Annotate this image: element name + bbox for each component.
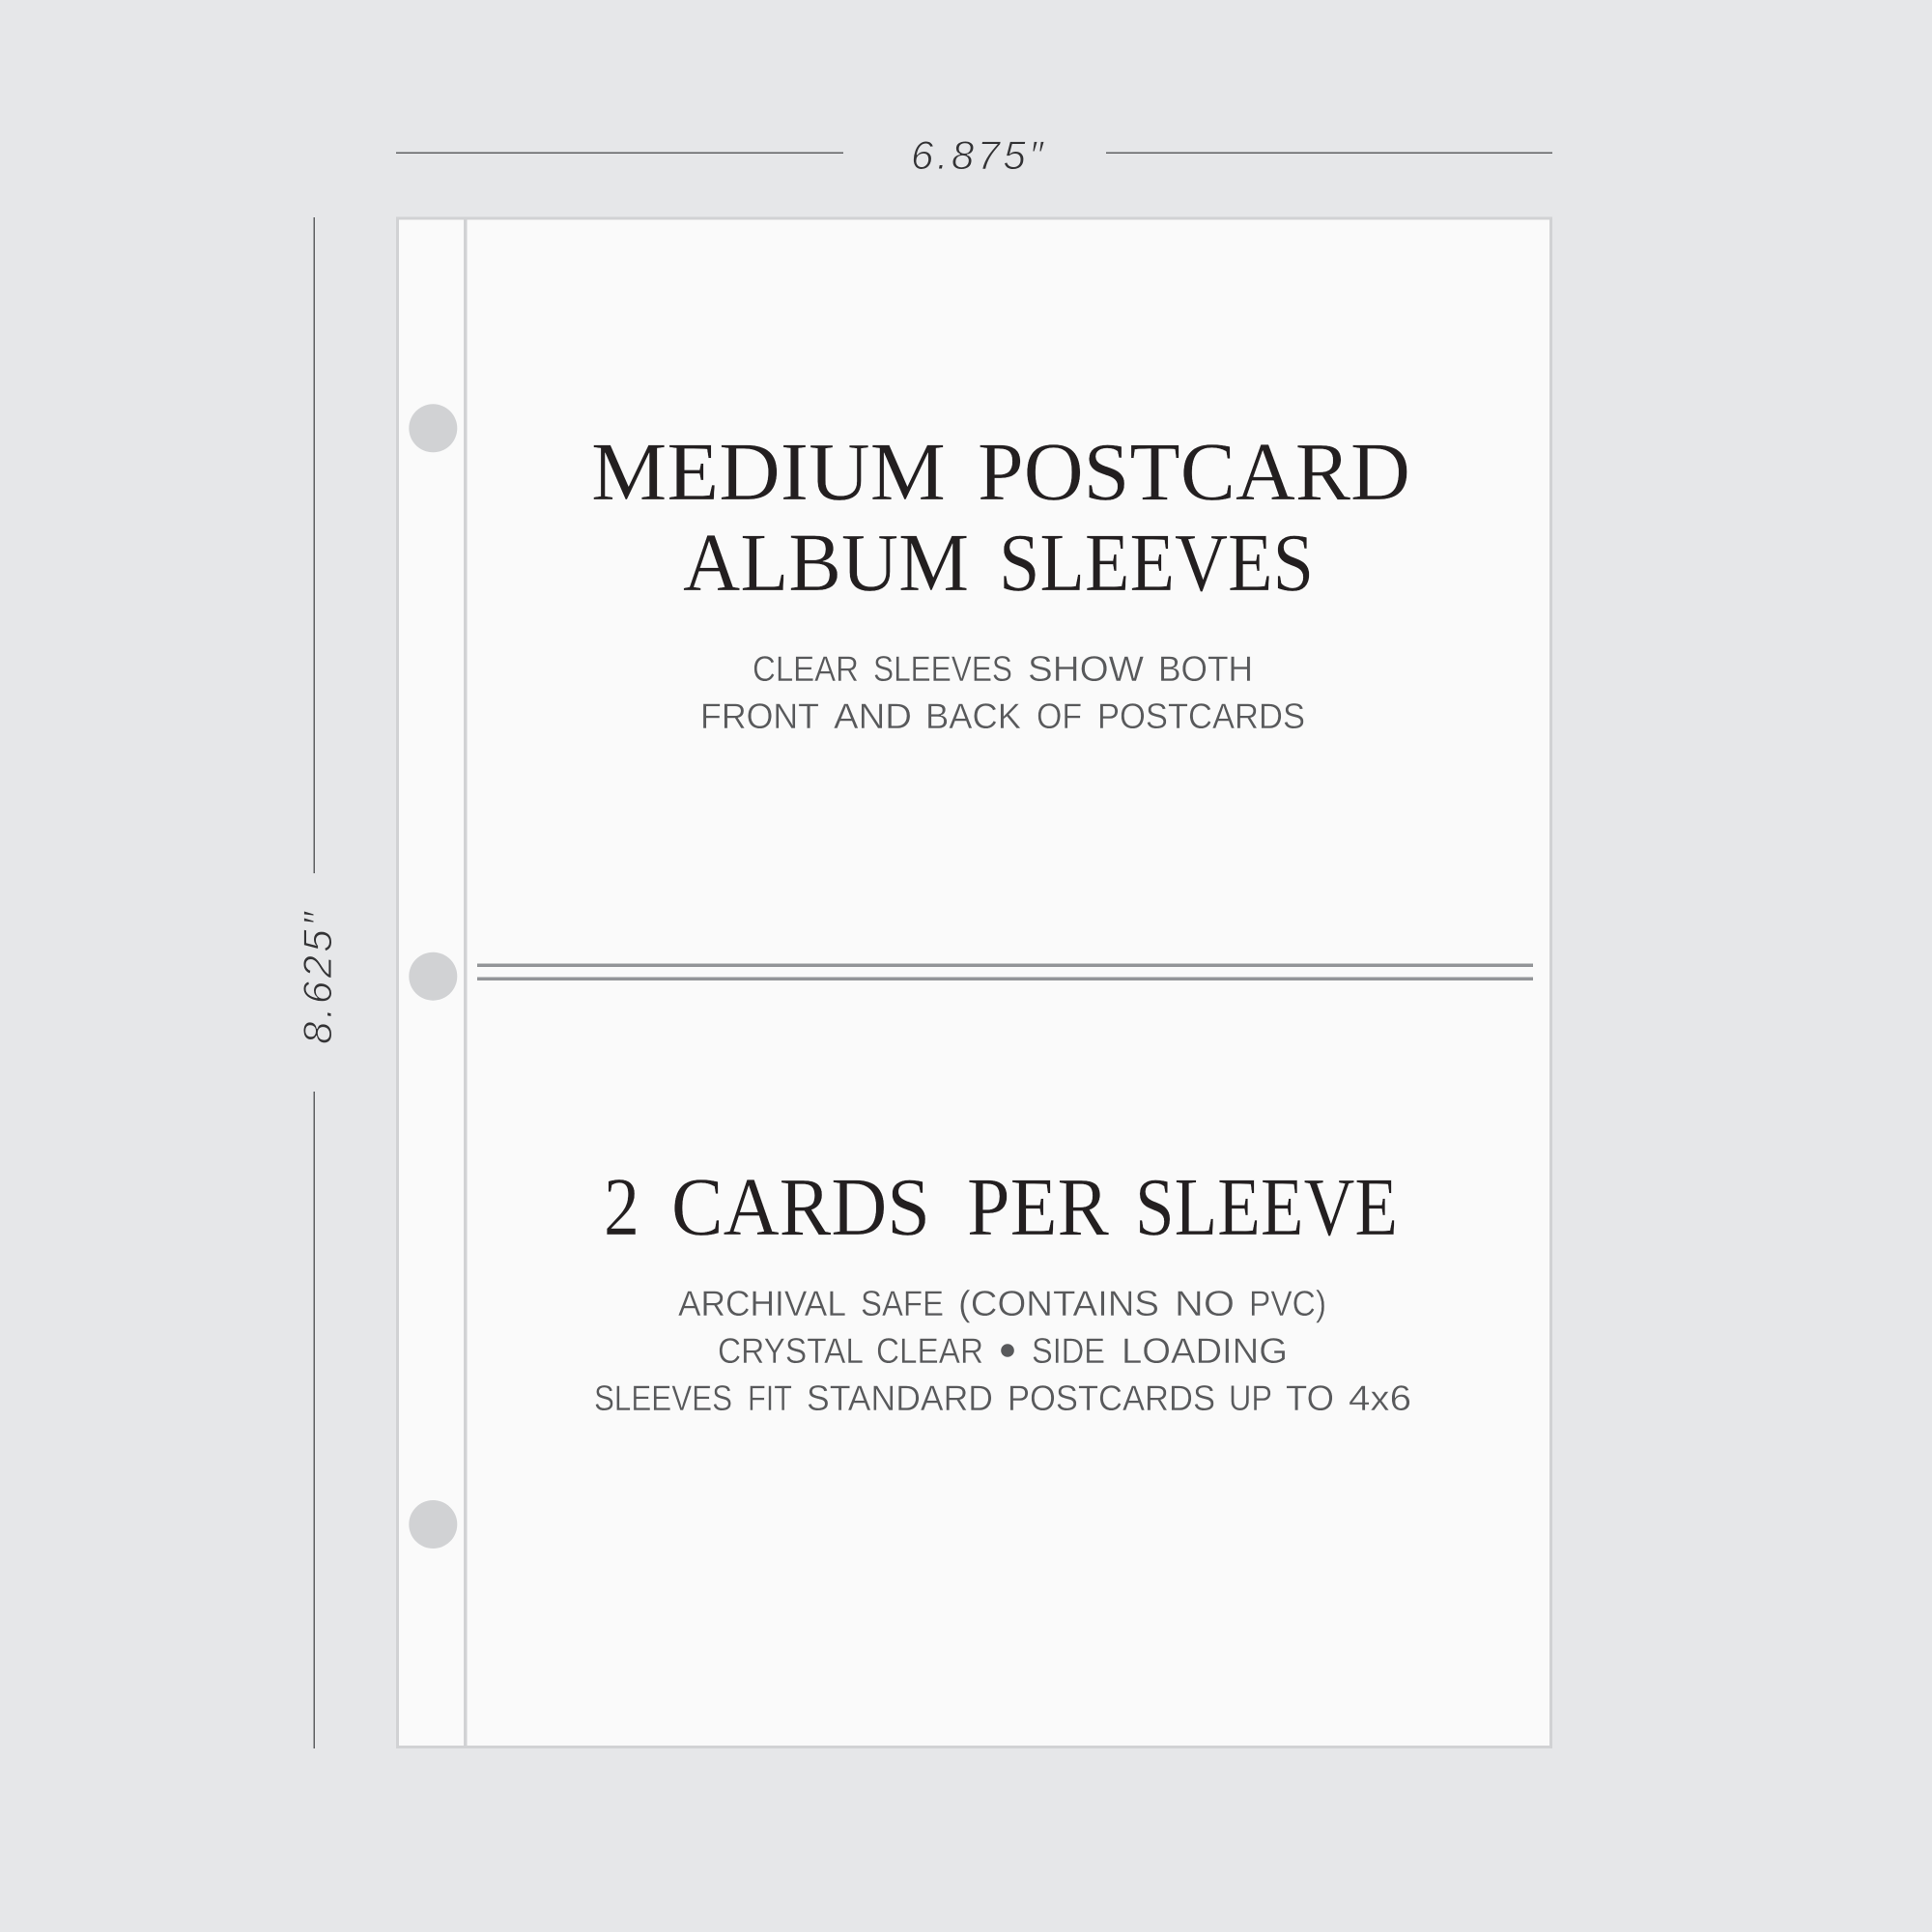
text block: sleeve features: SLEEVES [594, 1378, 732, 1418]
text block: clear sleeves: SLEEVES [873, 648, 1012, 689]
text block: clear sleeves: FRONT [700, 696, 819, 736]
text block: sleeve features: PVC) [1249, 1283, 1326, 1323]
text block: sleeve features: POSTCARDS [1008, 1378, 1215, 1418]
text block: clear sleeves: SHOW [1028, 648, 1145, 689]
text block: sleeve features: LOADING [1122, 1330, 1288, 1371]
text block: sleeve features: 4x6 [1349, 1378, 1411, 1418]
panel: album sleeve [398, 218, 1551, 1747]
icon: punch hole bottom [409, 1500, 457, 1548]
text block: clear sleeves [700, 648, 1305, 736]
heading: medium postcard album sleeves: MEDIUM [591, 425, 946, 518]
heading: 2 cards per sleeve: 2 [604, 1160, 639, 1253]
text block: sleeve features: CLEAR [876, 1330, 983, 1371]
text block: sleeve features: SAFE [861, 1283, 944, 1323]
text block: clear sleeves: OF [1037, 696, 1082, 736]
text block: clear sleeves: POSTCARDS [1097, 696, 1305, 736]
heading: medium postcard album sleeves [591, 425, 1410, 609]
heading: 2 cards per sleeve: CARDS [671, 1160, 930, 1253]
text block: sleeve features: TO [1286, 1378, 1334, 1418]
heading: medium postcard album sleeves: ALBUM [683, 516, 969, 609]
text block: sleeve features: SIDE [1032, 1330, 1105, 1371]
text block: clear sleeves: BACK [925, 696, 1021, 736]
text block: clear sleeves: CLEAR [753, 648, 859, 689]
text block: sleeve features: ARCHIVAL [678, 1283, 846, 1323]
icon: punch hole middle [409, 952, 457, 1001]
heading: 2 cards per sleeve [604, 1160, 1398, 1253]
text block: sleeve features: NO [1175, 1283, 1235, 1323]
text block: sleeve features: STANDARD [807, 1378, 993, 1418]
text block: sleeve features: CRYSTAL [718, 1330, 864, 1371]
text block: sleeve features: UP [1229, 1378, 1272, 1418]
width dimension: 6.875 inches: 6.875″ [911, 132, 1045, 178]
text block: sleeve features [594, 1283, 1411, 1418]
heading: medium postcard album sleeves: SLEEVES [999, 516, 1314, 609]
icon: punch hole top [409, 404, 457, 452]
heading: medium postcard album sleeves: POSTCARD [978, 425, 1410, 518]
height dimension: 8.625 inches: 8.625″ [295, 910, 340, 1044]
sleeve divider double line [477, 964, 1533, 980]
heading: 2 cards per sleeve: PER [967, 1160, 1110, 1253]
text block: clear sleeves: BOTH [1158, 648, 1253, 689]
binding strip rule [464, 218, 468, 1747]
text block: sleeve features: FIT [748, 1378, 792, 1418]
text block: clear sleeves: AND [834, 696, 912, 736]
heading: 2 cards per sleeve: SLEEVE [1135, 1160, 1398, 1253]
text block: sleeve features: (CONTAINS [958, 1283, 1159, 1323]
